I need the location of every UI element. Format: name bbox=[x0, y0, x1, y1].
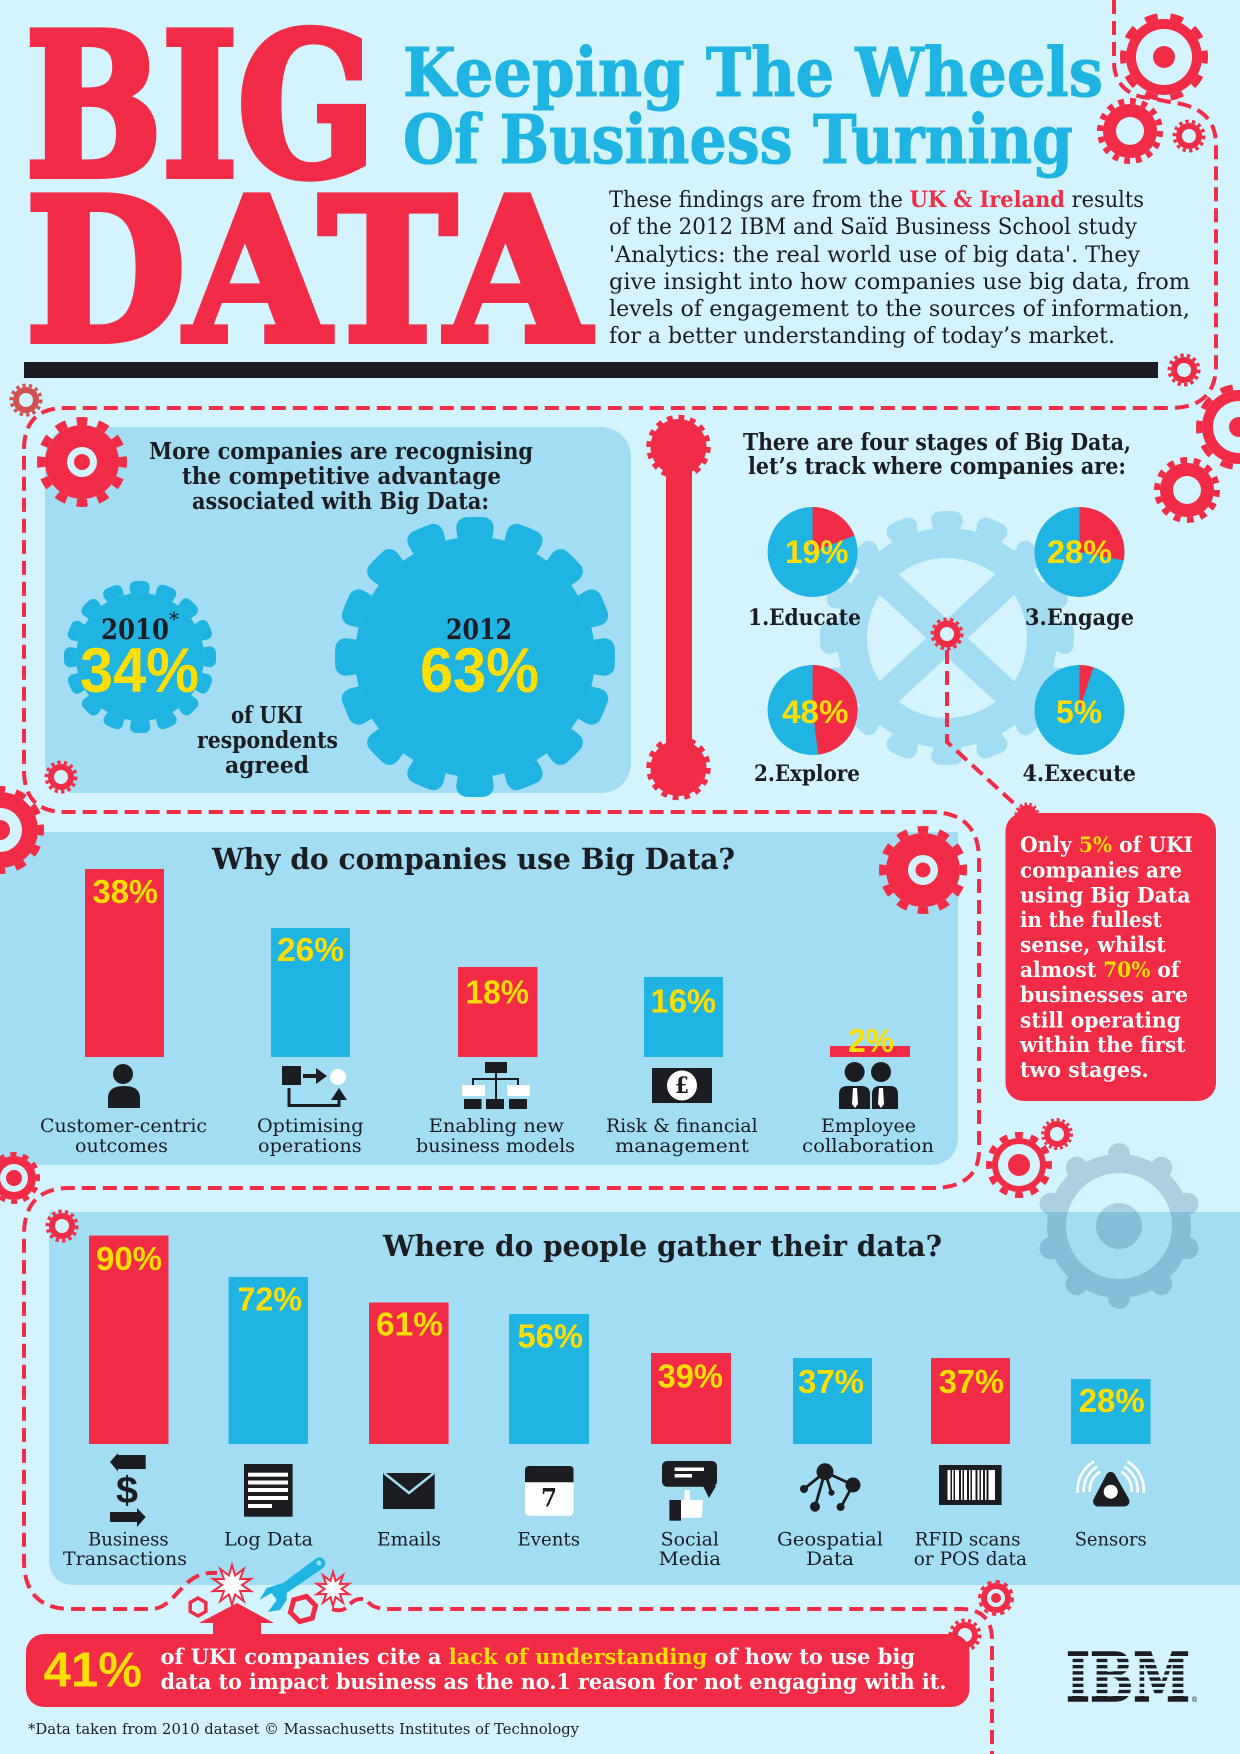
heading: where do people gather their data: Where do people gather their data? bbox=[382, 1229, 942, 1263]
icon: gear lower right bbox=[980, 1582, 1012, 1614]
stat: 28%: 28% bbox=[1047, 534, 1112, 570]
bar: log data 72% bbox=[229, 1277, 308, 1444]
subtitle: Of Business Turning bbox=[403, 100, 1073, 179]
icon: red gear with dot bbox=[989, 1135, 1049, 1195]
intro text block: for a better understanding of today’s market. bbox=[609, 324, 1115, 349]
icon: blue gear 2010 bbox=[70, 587, 210, 727]
stat: 2010 34%: 34% bbox=[80, 636, 199, 706]
callout: only 5%: in the fullest bbox=[1020, 907, 1162, 932]
intro text block bbox=[609, 187, 1190, 349]
bar: business models 18%: 18% bbox=[466, 974, 529, 1010]
icon: gear top small bbox=[1174, 121, 1204, 151]
bar: employee 2%: 2% bbox=[848, 1022, 894, 1059]
stat: 2012 63%: 63% bbox=[420, 636, 539, 706]
icon: pale background gear bbox=[829, 520, 1065, 756]
labels: where people gather data: or POS data bbox=[914, 1549, 1027, 1570]
callout: 41% lack of understanding: data to impact business as the no.1 reason for not engaging with it. bbox=[160, 1669, 946, 1694]
heading: competitive advantage: the competitive advantage bbox=[182, 463, 501, 490]
labels: where people gather data: Geospatial bbox=[777, 1530, 883, 1550]
panel: why companies use big data background bbox=[0, 832, 958, 1165]
heading: four stages: There are four stages of Big Data, bbox=[743, 429, 1131, 456]
stat: 19%: 19% bbox=[785, 534, 848, 570]
icon: gear behind callout bbox=[950, 1620, 980, 1650]
labels: why use big data bbox=[40, 1116, 934, 1157]
pie chart: educate 19% bbox=[768, 507, 858, 597]
icon: social media bbox=[662, 1461, 717, 1521]
text: of UKI respondents agreed: agreed bbox=[225, 752, 309, 779]
logo: IBM: IBM bbox=[1066, 1638, 1190, 1717]
bar: emails 61% bbox=[369, 1302, 449, 1444]
icon: banknote pound bbox=[652, 1068, 712, 1103]
icon: blue gear 2012 bbox=[345, 527, 605, 787]
bar: geospatial 37% bbox=[793, 1358, 872, 1444]
intro text block: of the 2012 IBM and Saïd Business School study bbox=[609, 215, 1138, 240]
panel: competitive advantage content bbox=[41, 421, 605, 792]
stat: 2012 63%: 2012 bbox=[446, 613, 512, 646]
labels: where people gather data bbox=[63, 1530, 1147, 1570]
labels: where people gather data: Data bbox=[806, 1549, 854, 1570]
labels: where people gather data: Log Data bbox=[224, 1530, 313, 1550]
icon: person bbox=[108, 1064, 140, 1108]
labels: why use big data: Employee bbox=[821, 1116, 916, 1137]
black divider bar bbox=[24, 362, 1158, 378]
title: DATA: DATA bbox=[26, 156, 592, 387]
heading: competitive advantage: More companies are recognising bbox=[149, 438, 533, 465]
icon: red gear panel corner bbox=[882, 830, 964, 910]
subtitle: Keeping The Wheels bbox=[403, 33, 1103, 112]
callout: only 5%: using Big Data bbox=[1020, 882, 1191, 908]
callout: 41% lack of understanding: 41% bbox=[44, 1644, 142, 1698]
intro text block: 'Analytics: the real world use of big data'. They bbox=[609, 243, 1141, 268]
icon: org chart bbox=[462, 1062, 530, 1109]
bar: sensors 28% bbox=[1071, 1379, 1151, 1444]
bar: optimising 26% bbox=[271, 928, 350, 1057]
icon: two employees bbox=[839, 1062, 898, 1109]
bar: business models 18% bbox=[458, 967, 538, 1057]
icon: transactions bbox=[110, 1453, 146, 1527]
pie chart: engage 28% bbox=[1034, 507, 1124, 597]
heading: why do companies use big data: Why do companies use Big Data? bbox=[211, 842, 735, 876]
labels: why use big data: operations bbox=[258, 1136, 362, 1157]
icon: gear top large bbox=[1123, 16, 1205, 98]
icon: envelope bbox=[383, 1473, 435, 1509]
icon: wrench hole bbox=[316, 1560, 322, 1566]
bar: emails 61%: 61% bbox=[376, 1306, 443, 1342]
icon: gear left edge lower bbox=[0, 1154, 38, 1202]
bar: events 56%: 56% bbox=[518, 1318, 583, 1354]
icon: gear top medium bbox=[1100, 101, 1160, 161]
divider: red axle with gears bbox=[648, 417, 708, 798]
labels: where people gather data: Events bbox=[518, 1530, 580, 1550]
icon: transactions: $ bbox=[116, 1470, 138, 1512]
labels: why use big data: collaboration bbox=[802, 1136, 934, 1157]
heading: four stages bbox=[743, 429, 1131, 480]
labels: where people gather data: Social bbox=[661, 1530, 719, 1550]
icon: hex nut left bbox=[190, 1598, 206, 1616]
icon: translucent grey gear bbox=[1050, 1154, 1188, 1298]
icon: banknote pound: £ bbox=[675, 1073, 689, 1099]
callout: only 5%: sense, whilst bbox=[1020, 932, 1166, 957]
panel: why companies use big data content bbox=[40, 830, 964, 1157]
intro text block: levels of engagement to the sources of information, bbox=[609, 297, 1190, 322]
icon: small gear panel corner bbox=[47, 1211, 77, 1241]
icon: calendar bbox=[525, 1466, 574, 1516]
labels: why use big data: Enabling new bbox=[429, 1116, 564, 1137]
icon: hex nut right bbox=[289, 1594, 317, 1624]
labels: why use big data: Customer-centric bbox=[40, 1116, 207, 1137]
text: of UKI respondents agreed bbox=[197, 702, 338, 779]
icon: sensor bbox=[1078, 1462, 1144, 1502]
labels: where people gather data: RFID scans bbox=[915, 1530, 1021, 1550]
icon: gear right bbox=[1157, 460, 1217, 520]
heading: four stages: let’s track where companies are: bbox=[748, 453, 1126, 480]
stat: 48%: 48% bbox=[782, 694, 848, 730]
bar: optimising 26%: 26% bbox=[277, 931, 344, 968]
bar: business transactions 90%: 90% bbox=[96, 1240, 162, 1277]
bar: employee 2% bbox=[830, 1022, 910, 1059]
text: of UKI respondents agreed: of UKI bbox=[231, 702, 303, 729]
bar: business transactions 90% bbox=[89, 1236, 168, 1444]
labels: why use big data: management bbox=[615, 1136, 750, 1157]
icon: small red gear bbox=[1042, 1120, 1072, 1148]
icon: gear in centre of wheel bbox=[932, 619, 962, 649]
dashed connector line: lower right bbox=[368, 1602, 992, 1754]
callout: 41% lack of understanding bbox=[26, 1634, 970, 1707]
bar: sensors 28%: 28% bbox=[1079, 1382, 1145, 1419]
labels: where people gather data: Sensors bbox=[1075, 1530, 1147, 1550]
callout: only 5%: companies are bbox=[1020, 858, 1182, 882]
callout: only 5%: still operating bbox=[1020, 1008, 1181, 1032]
labels: why use big data: business models bbox=[416, 1136, 575, 1157]
panel: where people gather data background bbox=[49, 1212, 1240, 1585]
callout: only 5%: almost 70% of bbox=[1020, 957, 1181, 982]
bar: customer-centric 38% bbox=[85, 869, 164, 1057]
icon: red gear panel corner bbox=[41, 421, 123, 503]
bar: risk 16%: 16% bbox=[650, 982, 716, 1020]
labels: where people gather data: Business bbox=[88, 1530, 169, 1550]
label: explore: 2.Explore bbox=[754, 761, 860, 787]
icon: starburst left bbox=[213, 1565, 251, 1605]
bar: log data 72%: 72% bbox=[238, 1280, 302, 1318]
dashed line to callout bbox=[947, 650, 1019, 808]
heading: competitive advantage bbox=[149, 438, 533, 515]
labels: why use big data: outcomes bbox=[75, 1136, 168, 1157]
stat: 5%: 5% bbox=[1056, 694, 1102, 730]
icon: calendar: 7 bbox=[541, 1484, 557, 1512]
label: educate: 1.Educate bbox=[748, 605, 861, 631]
bar: rfid 37% bbox=[931, 1358, 1010, 1444]
bar: social media 39%: 39% bbox=[658, 1358, 723, 1394]
labels: where people gather data: Emails bbox=[377, 1530, 441, 1550]
intro text block: give insight into how companies use big data, from bbox=[609, 270, 1190, 295]
panel: where people gather data content bbox=[47, 1211, 1151, 1570]
intro text block: These findings are from the UK & Ireland results bbox=[609, 187, 1144, 213]
bar: customer-centric 38%: 38% bbox=[92, 873, 158, 910]
callout: only 5% bbox=[1006, 804, 1216, 1101]
bar: geospatial 37%: 37% bbox=[798, 1363, 864, 1400]
arrow: up to wrench bbox=[199, 1603, 274, 1636]
icon: gear right edge bbox=[1199, 387, 1240, 467]
icon: wrench bbox=[259, 1557, 325, 1612]
panel: competitive advantage background bbox=[45, 427, 631, 793]
stat: 2010 34%: 2010 bbox=[101, 613, 169, 646]
footnote: *Data taken from 2010 dataset © Massachusetts Institutes of Technology bbox=[28, 1720, 580, 1738]
icon: gear by divider bbox=[1169, 355, 1199, 385]
logo: IBM: ® bbox=[1191, 1696, 1198, 1704]
callout: only 5%: Only 5% of UKI bbox=[1020, 832, 1193, 857]
icon: small gear panel bottom bbox=[46, 762, 76, 792]
label: execute: 4.Execute bbox=[1022, 761, 1136, 787]
labels: where people gather data: Transactions bbox=[63, 1549, 187, 1570]
icon: starburst right bbox=[317, 1572, 349, 1606]
pie chart: explore 48% bbox=[768, 665, 858, 755]
icon: notepad bbox=[244, 1464, 293, 1517]
pie chart: execute 5% bbox=[1034, 665, 1124, 755]
icon: gear left edge upper bbox=[11, 385, 41, 415]
labels: why use big data: Risk & financial bbox=[606, 1116, 758, 1137]
bar: rfid 37%: 37% bbox=[939, 1363, 1004, 1400]
icon: process flow bbox=[282, 1066, 347, 1106]
heading: competitive advantage: associated with Big Data: bbox=[192, 488, 489, 515]
callout: only 5%: businesses are bbox=[1020, 982, 1188, 1007]
stat: 2010 34%: * bbox=[169, 607, 179, 631]
icon: gear left edge middle bbox=[0, 789, 41, 871]
callout: 41% lack of understanding: of UKI companies cite a lack of understanding of how to use big bbox=[160, 1644, 915, 1669]
icon: barcode bbox=[939, 1465, 1002, 1505]
bar: events 56% bbox=[509, 1314, 589, 1444]
callout: only 5%: within the first bbox=[1019, 1032, 1186, 1057]
labels: why use big data: Optimising bbox=[257, 1116, 364, 1137]
subtitle bbox=[403, 33, 1103, 179]
labels: where people gather data: Media bbox=[659, 1549, 721, 1570]
label: engage: 3.Engage bbox=[1025, 605, 1134, 631]
icon: geospatial network bbox=[800, 1463, 860, 1512]
stat: 2010 34% bbox=[80, 607, 199, 706]
bar: risk 16% bbox=[644, 977, 723, 1057]
dashed connector line: fragments by wrench bbox=[332, 1599, 363, 1610]
callout: only 5%: two stages. bbox=[1020, 1057, 1149, 1082]
bar: social media 39% bbox=[651, 1353, 731, 1444]
text: of UKI respondents agreed: respondents bbox=[197, 727, 338, 754]
